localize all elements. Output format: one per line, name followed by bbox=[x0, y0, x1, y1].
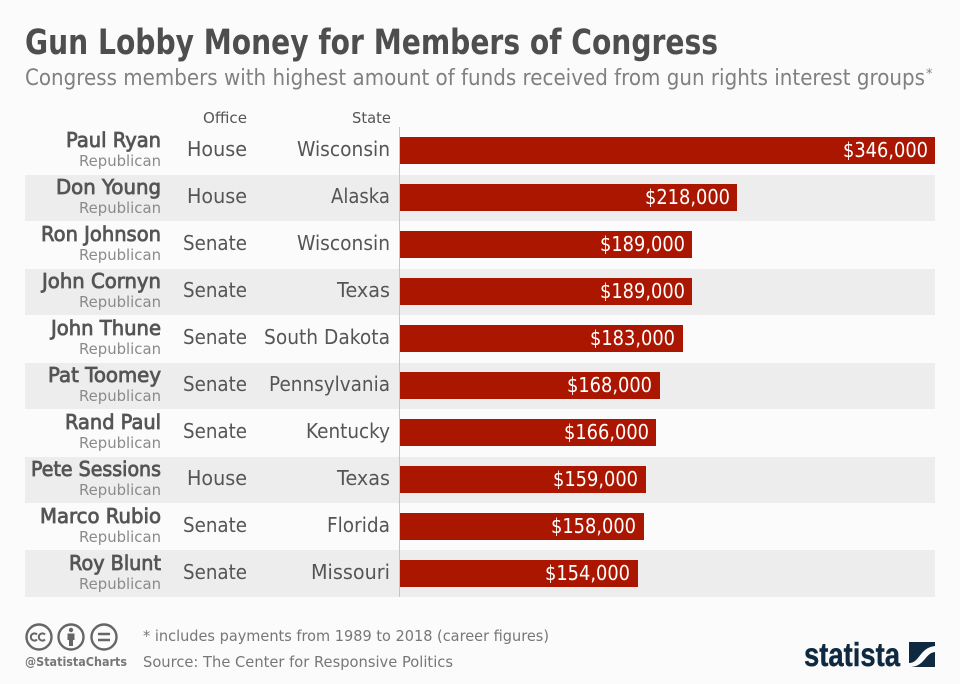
row: John Cornyn: John Cornyn bbox=[40, 269, 161, 293]
row: Roy Blunt: Missouri bbox=[311, 560, 390, 584]
title: Gun Lobby Money for Members of Congress bbox=[25, 23, 718, 63]
row: Marco Rubio: Marco Rubio bbox=[40, 504, 161, 528]
row: Ron Johnson: Ron Johnson bbox=[41, 222, 161, 246]
row: Rand Paul: Rand Paul bbox=[65, 410, 161, 434]
row: Ron Johnson: $189,000 bbox=[600, 232, 685, 256]
row: Paul Ryan: Wisconsin bbox=[297, 137, 390, 161]
social handle: @StatistaCharts bbox=[25, 654, 127, 669]
row: Ron Johnson: Senate bbox=[183, 231, 247, 255]
row: Marco Rubio: Senate bbox=[183, 513, 247, 537]
row: Pat Toomey: Senate bbox=[183, 372, 247, 396]
row: Rand Paul: Senate bbox=[183, 419, 247, 443]
row: John Cornyn: Republican bbox=[79, 293, 161, 311]
row: Don Young bbox=[56, 175, 737, 217]
row: Pete Sessions: Pete Sessions bbox=[31, 457, 161, 481]
row: Ron Johnson: Wisconsin bbox=[297, 231, 390, 255]
row: Don Young: $218,000 bbox=[645, 185, 730, 209]
row: Paul Ryan bbox=[66, 128, 935, 170]
row: Roy Blunt: Senate bbox=[183, 560, 247, 584]
row: John Cornyn: Texas bbox=[336, 278, 390, 302]
row: Roy Blunt: $154,000 bbox=[545, 561, 630, 585]
row: John Cornyn: Senate bbox=[183, 278, 247, 302]
row: Roy Blunt bbox=[69, 551, 638, 593]
statista logo: statista bbox=[804, 636, 901, 673]
footnote: * includes payments from 1989 to 2018 (career figures) bbox=[143, 627, 549, 645]
row: Pat Toomey: Republican bbox=[79, 387, 161, 405]
row: Rand Paul: Kentucky bbox=[306, 419, 390, 443]
row: Pat Toomey: $168,000 bbox=[567, 373, 652, 397]
subtitle: * bbox=[926, 67, 933, 82]
row: Paul Ryan: $346,000 bbox=[843, 138, 928, 162]
row: John Cornyn bbox=[40, 269, 692, 311]
row: Roy Blunt: Republican bbox=[79, 575, 161, 593]
row: John Thune: John Thune bbox=[49, 316, 161, 340]
row: Don Young: House bbox=[187, 184, 247, 208]
row: John Thune: South Dakota bbox=[264, 325, 390, 349]
icon: creative commons licence bbox=[26, 624, 116, 650]
row: Paul Ryan: House bbox=[187, 137, 247, 161]
row: Paul Ryan: Paul Ryan bbox=[66, 128, 161, 152]
row: Marco Rubio: Republican bbox=[79, 528, 161, 546]
row: John Cornyn: $189,000 bbox=[600, 279, 685, 303]
row: Pat Toomey: Pennsylvania bbox=[269, 372, 390, 396]
row: Pete Sessions: Texas bbox=[336, 466, 390, 490]
row: Ron Johnson: Republican bbox=[79, 246, 161, 264]
row: Paul Ryan: Republican bbox=[79, 152, 161, 170]
row: John Thune bbox=[49, 316, 683, 358]
row: Pete Sessions: $159,000 bbox=[553, 467, 638, 491]
row: Pat Toomey bbox=[48, 363, 660, 405]
row: Rand Paul bbox=[65, 410, 656, 452]
source: Source: The Center for Responsive Politics bbox=[143, 653, 453, 671]
row: Pete Sessions: Republican bbox=[79, 481, 161, 499]
row: Pete Sessions: House bbox=[187, 466, 247, 490]
row: Marco Rubio bbox=[40, 504, 644, 546]
row: Marco Rubio: Florida bbox=[327, 513, 390, 537]
column header: office: Office bbox=[203, 109, 247, 127]
row: Don Young: Alaska bbox=[331, 184, 390, 208]
row: John Thune: Senate bbox=[183, 325, 247, 349]
row: John Thune: $183,000 bbox=[590, 326, 675, 350]
row: Rand Paul: $166,000 bbox=[564, 420, 649, 444]
row: Rand Paul: Republican bbox=[79, 434, 161, 452]
row: Roy Blunt: Roy Blunt bbox=[69, 551, 161, 575]
row: Pete Sessions bbox=[31, 457, 646, 499]
row: Pat Toomey: Pat Toomey bbox=[48, 363, 161, 387]
column header: state: State bbox=[352, 109, 391, 127]
table stripes bbox=[25, 175, 935, 597]
row: Don Young: Don Young bbox=[56, 175, 161, 199]
chart axis line bbox=[399, 127, 400, 597]
row: John Thune: Republican bbox=[79, 340, 161, 358]
row: Ron Johnson bbox=[41, 222, 692, 264]
row: Marco Rubio: $158,000 bbox=[551, 514, 636, 538]
row: Don Young: Republican bbox=[79, 199, 161, 217]
